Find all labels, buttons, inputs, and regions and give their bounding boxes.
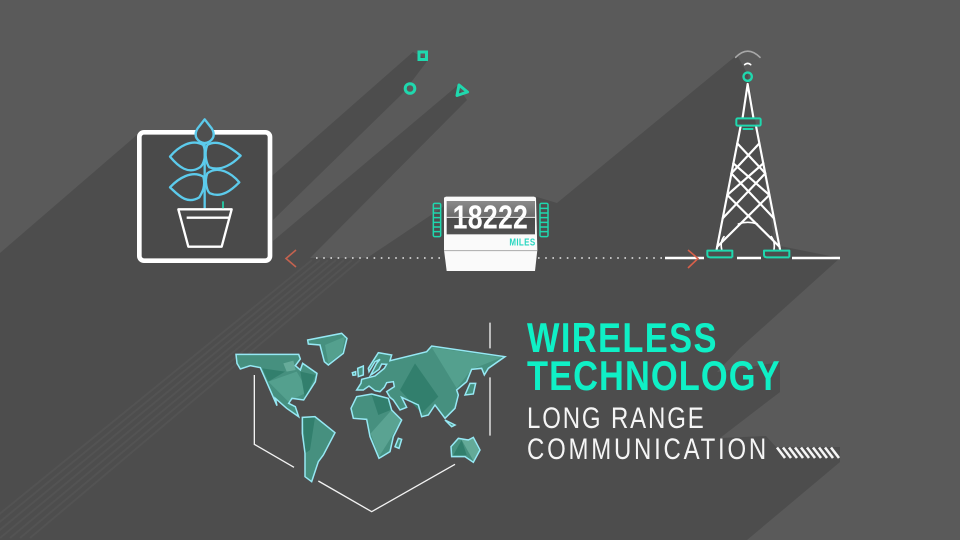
icon: square [419, 52, 426, 60]
frame [139, 132, 270, 261]
odometer window [447, 201, 535, 234]
floating shapes [405, 52, 468, 96]
title [527, 315, 780, 400]
dotted distance line [316, 257, 664, 259]
ground line [665, 257, 840, 259]
subtitle: LONG RANGE [527, 400, 704, 435]
plant icon panel [139, 119, 270, 261]
hatch stripes [777, 448, 839, 458]
beacon [743, 72, 752, 81]
world map [236, 323, 505, 512]
title block [527, 315, 839, 466]
radio tower [707, 51, 789, 257]
subtitle [527, 400, 766, 466]
odometer [433, 197, 548, 271]
map bracket [254, 323, 490, 512]
title: TECHNOLOGY [527, 353, 780, 400]
odometer digits: 18222 [453, 200, 528, 236]
left arrow [286, 250, 296, 267]
continents outline [236, 333, 505, 482]
miles label: MILES [509, 237, 535, 248]
subtitle: COMMUNICATION [527, 431, 766, 466]
tower collars and feet [707, 118, 789, 257]
map facets [262, 337, 502, 461]
plant leaves [170, 119, 241, 209]
right arrow [688, 250, 698, 268]
left knob [433, 203, 441, 237]
pot [178, 209, 232, 247]
icon: circle [405, 84, 415, 93]
odometer body [444, 197, 537, 271]
tower frame [717, 84, 780, 249]
title: WIRELESS [527, 315, 716, 362]
sprout [220, 201, 225, 208]
icon: triangle [457, 85, 468, 96]
signal arcs [736, 51, 760, 65]
continents fill [236, 333, 505, 482]
right knob [540, 203, 548, 237]
